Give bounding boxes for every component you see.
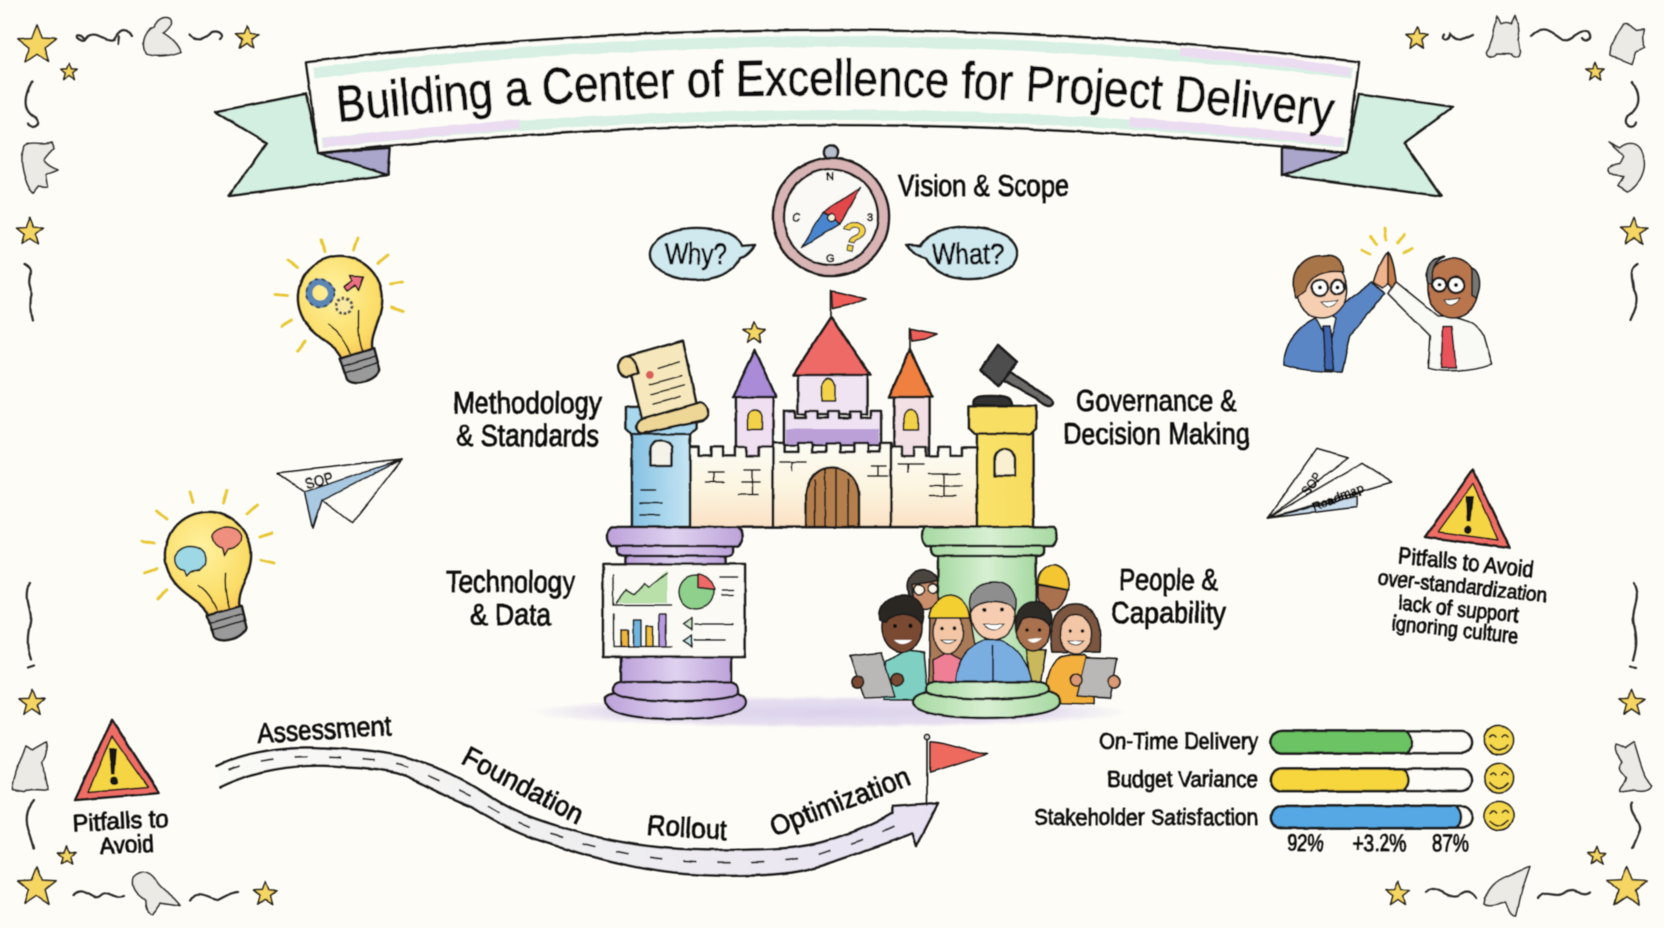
- blue needle: [802, 212, 840, 247]
- icon: gavel: [974, 345, 1053, 406]
- screw base: [340, 348, 383, 387]
- woman with tablet: [1047, 604, 1120, 704]
- roadmap arrow: [217, 748, 938, 876]
- pitfalls label left: Pitfalls to: [72, 805, 169, 837]
- icon: high five: [1284, 228, 1492, 372]
- title text: Building a Center of Excellence for Project Delivery: [337, 57, 1336, 137]
- bubble: what: What?: [932, 238, 1004, 271]
- line chart: [613, 575, 671, 605]
- red speech bubble: [212, 527, 241, 556]
- metric values: 87%: [1432, 830, 1469, 857]
- bar chart: [614, 614, 672, 647]
- decorative border: mid sides: [27, 583, 1637, 668]
- centre wall: [773, 443, 891, 527]
- compass: vision and scope: [773, 145, 889, 276]
- road labels: Assessment: [256, 710, 392, 749]
- label: technology and data: Technology: [446, 564, 575, 599]
- road labels: Optimization: [765, 761, 914, 843]
- compass loop: [824, 145, 838, 159]
- capital ring: [931, 544, 1044, 556]
- rays: [275, 238, 403, 351]
- label: methodology and standards: Methodology: [453, 385, 602, 420]
- pitfalls label left: [72, 805, 170, 861]
- warning triangle left: [75, 720, 159, 800]
- left tail: [215, 94, 388, 196]
- green pillar with people: [850, 527, 1120, 718]
- hands: [1374, 252, 1388, 288]
- icon: paper plane right: Roadmap: [1310, 481, 1366, 514]
- left spire star: [743, 322, 765, 343]
- pitfalls list: [1372, 540, 1551, 651]
- metric values: [1287, 830, 1469, 857]
- compass rim: [773, 158, 889, 276]
- glass: [288, 246, 397, 366]
- decorative border: bottom right: [1386, 690, 1652, 916]
- label: vision and scope: Vision & Scope: [898, 168, 1069, 203]
- capital: [922, 527, 1057, 546]
- boy: [1015, 602, 1052, 685]
- pitfalls list: ignoring culture: [1391, 612, 1520, 648]
- metric: on-time delivery: [1099, 726, 1514, 754]
- metric: on-time delivery: On-Time Delivery: [1099, 728, 1258, 754]
- castle: [626, 290, 1036, 527]
- base: [913, 692, 1060, 718]
- label: people and capability: People &: [1119, 562, 1218, 597]
- left spire: [736, 397, 773, 467]
- label: methodology and standards: [453, 385, 602, 453]
- label: technology and data: & Data: [470, 597, 552, 632]
- right spire: [894, 397, 929, 467]
- metric: stakeholder satisfaction: [1034, 802, 1514, 830]
- blue speech bubble: [175, 546, 206, 576]
- glass: [155, 502, 265, 623]
- decorative border: top right: [1406, 15, 1647, 320]
- gray haired man: [955, 582, 1032, 688]
- sparks: [1362, 228, 1412, 254]
- goal flag: [924, 734, 987, 805]
- left wall: [690, 447, 773, 527]
- column shaft: [938, 550, 1036, 688]
- dashes: [228, 757, 902, 862]
- road fill: [217, 748, 938, 876]
- bubble: why: [650, 228, 755, 280]
- question mark: ?: [836, 211, 871, 262]
- icon: lightbulb with gears: [275, 238, 406, 394]
- icon: lightbulb with speech bubbles: [142, 491, 274, 651]
- label: people and capability: Capability: [1111, 595, 1226, 630]
- road labels: Foundation: [457, 740, 589, 830]
- right wall: [891, 447, 977, 527]
- metric values: +3.2%: [1353, 830, 1406, 857]
- road lower edge: [220, 766, 912, 876]
- centre keep upper tower: [798, 372, 867, 414]
- blue tower: [626, 407, 696, 527]
- bubble: what: [906, 227, 1017, 279]
- title banner: [213, 28, 1455, 198]
- right fold: [1282, 148, 1347, 175]
- purple pillar: [603, 527, 746, 719]
- label: methodology and standards: & Standards: [456, 418, 599, 453]
- gate: [806, 468, 859, 527]
- road top edge: [217, 748, 938, 850]
- decorative border: top left: [17, 18, 259, 320]
- back right worker: [1037, 565, 1069, 610]
- pitfalls label left: Avoid: [99, 830, 154, 860]
- plane labels: SOP: [1299, 470, 1325, 498]
- label: people and capability: [1111, 562, 1226, 630]
- helmet woman: [929, 595, 976, 690]
- compass letters: N: [826, 171, 834, 183]
- road labels: [256, 710, 914, 846]
- blue gear: [309, 282, 331, 304]
- main ribbon: [306, 30, 1359, 153]
- legend marks: [683, 618, 692, 630]
- ground shadow: [530, 696, 1130, 728]
- small gear: [336, 298, 352, 314]
- decorative border: bottom left: [12, 690, 277, 915]
- metric: budget variance: [1107, 764, 1514, 792]
- back left person: [908, 570, 939, 609]
- metric: budget variance: Budget Variance: [1107, 766, 1258, 792]
- metric values: 92%: [1287, 830, 1324, 857]
- metrics panel: [1034, 726, 1514, 857]
- right man body: [1388, 282, 1492, 371]
- curly haired man: [880, 596, 928, 700]
- bubble: why: Why?: [665, 238, 727, 271]
- compass: vision and scope: G: [826, 253, 835, 265]
- pitfalls list: Pitfalls to Avoid: [1397, 542, 1535, 582]
- warning triangle right: [1425, 470, 1510, 548]
- bricks: [706, 462, 962, 496]
- wall base line: [629, 526, 1036, 528]
- label: technology and data: [446, 564, 575, 632]
- left fold: [318, 148, 390, 175]
- pie chart: [679, 575, 713, 609]
- compass: vision and scope: 3: [867, 212, 873, 224]
- left man head: [1293, 255, 1347, 318]
- compass: vision and scope: C: [792, 212, 800, 224]
- rays: [142, 491, 274, 599]
- ribbon colour strips: [314, 42, 1352, 73]
- pitfalls list: lack of support: [1397, 592, 1520, 627]
- icon: paper plane left: [277, 459, 402, 528]
- icon: scroll: [616, 339, 710, 435]
- label: governance and decision making: Governance &: [1076, 383, 1237, 418]
- red needle: [823, 188, 860, 224]
- dashboard panel: [603, 564, 745, 657]
- label: governance and decision making: [1063, 383, 1250, 451]
- screw base: [207, 606, 249, 644]
- notebook: [850, 653, 903, 698]
- road labels: Rollout: [646, 809, 728, 846]
- metric: stakeholder satisfaction: Stakeholder Satisfaction: [1034, 804, 1258, 830]
- icon: paper plane right: [1268, 449, 1392, 518]
- keep battlements: [784, 411, 881, 445]
- right tail: [1282, 94, 1453, 196]
- left man body: [1284, 282, 1384, 372]
- pitfalls list: over-standardization: [1377, 566, 1548, 607]
- plane label: SOP: [304, 470, 335, 493]
- label: governance and decision making: Decision Making: [1063, 416, 1250, 451]
- right man head: [1427, 256, 1479, 318]
- yellow tower: [969, 406, 1036, 527]
- red arrow: [344, 276, 363, 291]
